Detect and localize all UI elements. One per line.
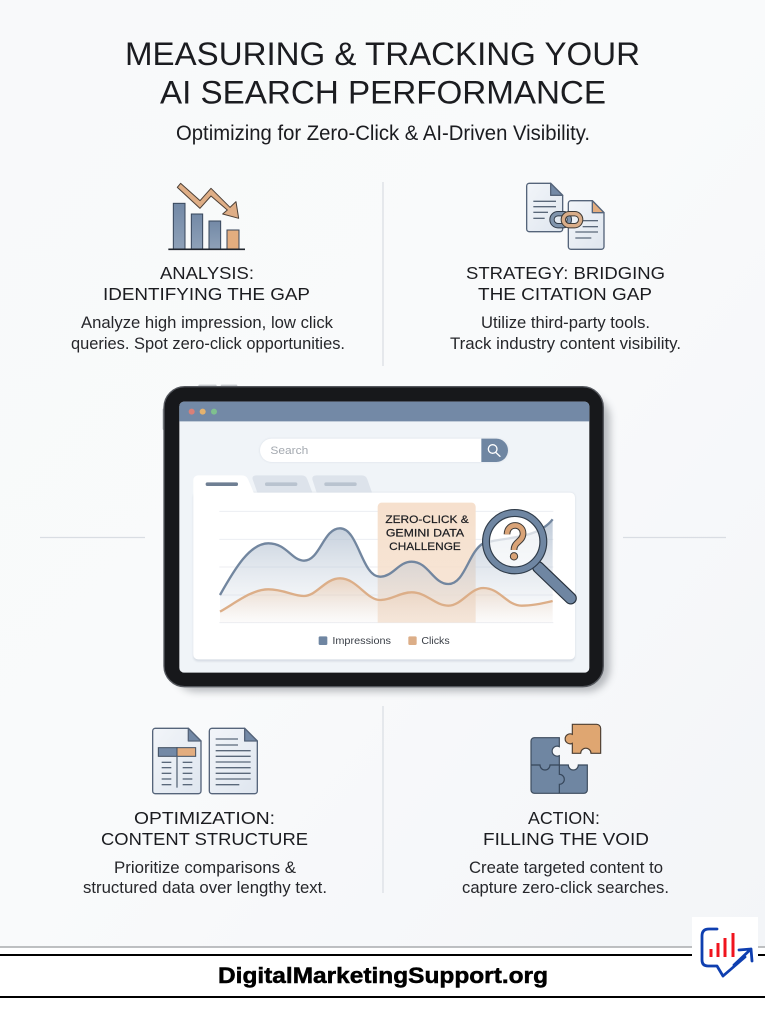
heading: STRATEGY: BRIDGING [466, 263, 665, 283]
tablet body [164, 387, 603, 687]
body text: capture zero-click searches. [462, 879, 669, 897]
body text: Create targeted content to [469, 859, 663, 877]
title: AI SEARCH PERFORMANCE [160, 74, 606, 110]
search bar [260, 439, 508, 462]
heading: FILLING THE VOID [483, 829, 649, 849]
panel: action [462, 724, 669, 897]
chart card [193, 475, 575, 661]
heading [466, 263, 665, 304]
heading [101, 808, 308, 849]
subtitle: Optimizing for Zero-Click & AI-Driven Visibility. [176, 122, 590, 145]
heading: ACTION: [528, 808, 600, 828]
heading [483, 808, 649, 849]
body text: Track industry content visibility. [450, 335, 681, 353]
heading: ANALYSIS: [160, 263, 254, 283]
header [125, 36, 640, 145]
body text: Prioritize comparisons & [114, 859, 296, 877]
heading: CONTENT STRUCTURE [101, 829, 308, 849]
legend: Clicks [421, 636, 450, 647]
panel: analysis [71, 183, 345, 353]
body text: queries. Spot zero-click opportunities. [71, 335, 345, 353]
icon: puzzle pieces [531, 724, 601, 793]
footer [0, 917, 765, 1024]
heading: OPTIMIZATION: [134, 808, 275, 828]
icon: declining bar chart [168, 183, 245, 249]
icon: linked documents [527, 183, 604, 249]
legend [319, 636, 450, 647]
legend: Impressions [332, 636, 391, 647]
tabs [252, 475, 372, 493]
body text [83, 859, 327, 897]
body text [450, 314, 681, 353]
window controls [189, 409, 217, 415]
callout label: CHALLENGE [389, 541, 461, 553]
panel: strategy [450, 183, 681, 353]
callout label [385, 514, 469, 553]
grid lines [219, 511, 553, 623]
clicks line [220, 578, 553, 612]
body text: Utilize third-party tools. [481, 314, 650, 332]
website name: DigitalMarketingSupport.org [218, 963, 548, 988]
highlight band [378, 503, 476, 623]
body text [462, 859, 669, 897]
heading: IDENTIFYING THE GAP [103, 284, 310, 304]
tablet mockup [163, 385, 610, 692]
clicks area [220, 578, 553, 623]
browser title bar [179, 402, 589, 421]
logo [692, 917, 758, 983]
body text: structured data over lengthy text. [83, 879, 327, 897]
body text [71, 314, 345, 353]
search bar: Search [270, 445, 308, 457]
callout label: ZERO-CLICK & [385, 514, 469, 526]
title [125, 36, 640, 110]
icon: structured vs long documents [153, 728, 257, 794]
title: MEASURING & TRACKING YOUR [125, 36, 640, 72]
impressions area [220, 519, 553, 623]
icon: magnifying glass [486, 513, 571, 598]
panel: optimization [83, 728, 327, 897]
heading: THE CITATION GAP [478, 284, 652, 304]
impressions line [220, 519, 553, 595]
heading [103, 263, 310, 304]
screen [179, 402, 589, 673]
callout label: GEMINI DATA [386, 527, 465, 539]
body text: Analyze high impression, low click [81, 314, 334, 332]
